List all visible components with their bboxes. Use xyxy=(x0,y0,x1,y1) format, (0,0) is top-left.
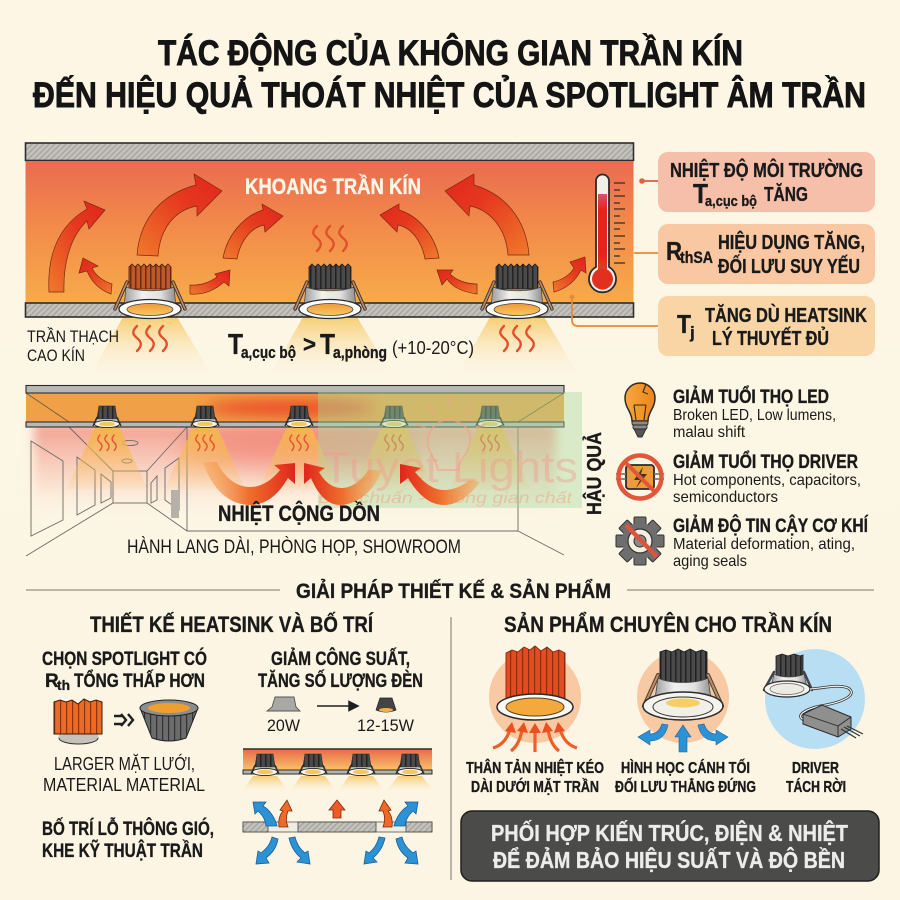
panel: consequence mechanical xyxy=(616,515,869,570)
panel: products for closed ceilings xyxy=(461,612,879,881)
product: extended heat sink xyxy=(466,646,604,796)
accumulated heat arrows xyxy=(203,462,480,505)
conclusion banner xyxy=(461,811,879,881)
panel: ambient temperature callout: a,cục bộ xyxy=(705,193,757,210)
spotlight 1 xyxy=(115,264,185,318)
heat waves xyxy=(133,226,534,351)
ventilation text: BỐ TRÍ LỖ THÔNG GIÓ, xyxy=(42,818,214,840)
lower slab xyxy=(26,303,634,317)
icon: 20W lamp xyxy=(267,697,300,735)
temperature formula: > xyxy=(303,331,316,357)
panel: Tj callout: TĂNG DÙ HEATSINK xyxy=(705,303,867,327)
panel: Tj callout xyxy=(570,294,875,356)
panel: RthSA callout xyxy=(634,224,875,284)
heat glow xyxy=(34,424,556,514)
cavity label: KHOANG TRẦN KÍN xyxy=(245,174,421,199)
panel: consequence driver: semiconductors xyxy=(673,489,778,506)
panel: consequence LED xyxy=(625,383,836,441)
light cones xyxy=(66,427,531,490)
gypsum ceiling label: CAO KÍN xyxy=(27,346,85,365)
panel: consequence LED: malau shift xyxy=(673,424,746,441)
title xyxy=(33,33,866,115)
icon: 12-15W lamp xyxy=(357,698,414,735)
arrow: to lower power xyxy=(317,702,358,710)
material text xyxy=(43,753,205,795)
icon: small heatsink xyxy=(54,699,102,744)
heat waves xyxy=(98,435,499,450)
material text: LARGER MẶT LƯỚI, xyxy=(54,753,195,774)
caption: THÂN TẢN NHIỆT KÉO xyxy=(466,758,604,777)
driver box xyxy=(803,705,851,737)
reduce power text xyxy=(258,648,423,692)
convection arrows xyxy=(49,174,586,294)
material text: MATERIAL MATERIAL xyxy=(43,775,205,795)
panel: ambient temperature callout xyxy=(639,152,875,212)
panel: closed ceiling cross-section xyxy=(26,143,634,372)
ventilation text xyxy=(42,818,214,862)
product: separate driver xyxy=(764,649,865,796)
watermark: Tuyet Lights xyxy=(322,443,578,492)
product: optimized fins xyxy=(615,649,756,796)
icon: broken bulb xyxy=(625,383,655,437)
spotlight 3 xyxy=(482,264,552,318)
icon: crossed driver xyxy=(616,456,664,498)
ventilation text: KHE KỸ THUẬT TRẦN xyxy=(42,840,203,862)
panel: RthSA callout: ĐỐI LƯU SUY YẾU xyxy=(718,254,860,278)
panel: consequence driver xyxy=(616,451,861,506)
temperature formula: T xyxy=(320,329,335,361)
reduce power text: TĂNG SỐ LƯỢNG ĐÈN xyxy=(258,670,423,692)
icon: 12-15W lamp: 12-15W xyxy=(357,716,414,735)
panel: Tj callout: j xyxy=(689,323,695,342)
gypsum ceiling label xyxy=(27,327,119,365)
room caption: HÀNH LANG DÀI, PHÒNG HỌP, SHOWROOM xyxy=(127,536,461,558)
watermark: Đèn chuẩn - Không gian chất xyxy=(318,489,573,507)
panel: heatsink design and layout xyxy=(42,611,434,864)
consequences heading: HẬU QUẢ xyxy=(582,432,606,515)
temperature formula: a,cục bộ xyxy=(241,343,296,362)
panel: consequence driver: GIẢM TUỔI THỌ DRIVER xyxy=(673,451,858,473)
upper slab xyxy=(26,143,634,160)
product: separate driver: TÁCH RỜI xyxy=(786,777,846,796)
title: TÁC ĐỘNG CỦA KHÔNG GIAN TRẦN KÍN xyxy=(158,33,743,73)
vented ceiling xyxy=(243,822,432,832)
temperature formula xyxy=(228,329,474,362)
choose spotlight text: th xyxy=(57,677,70,693)
section heading: solutions: GIẢI PHÁP THIẾT KẾ & SẢN PHẨM xyxy=(296,580,611,603)
temperature formula: T xyxy=(228,329,243,361)
spotlight 2 xyxy=(295,264,365,318)
ventilation arrows xyxy=(253,800,418,864)
product: optimized fins: ĐỐI LƯU THẲNG ĐỨNG xyxy=(615,776,756,796)
upward heat arrows xyxy=(493,729,577,752)
light cones xyxy=(92,317,577,372)
gypsum ceiling label: TRẦN THẠCH xyxy=(27,327,119,346)
icon: crossed gear xyxy=(616,517,664,565)
icon: double chevron xyxy=(114,714,133,726)
panel: consequence LED: Broken LED, Low lumens, xyxy=(673,407,836,424)
caption: HÌNH HỌC CÁNH TỐI xyxy=(621,757,750,777)
mini ceiling with spotlights xyxy=(241,749,434,792)
conclusion banner: ĐỂ ĐẢM BẢO HIỆU SUẤT VÀ ĐỘ BỀN xyxy=(493,845,845,873)
reduce power text: GIẢM CÔNG SUẤT, xyxy=(271,648,410,670)
icon: large heatsink xyxy=(140,700,198,741)
panel: consequence LED: GIẢM TUỔI THỌ LED xyxy=(673,386,829,408)
room heading: NHIỆT CỘNG DỒN xyxy=(218,501,380,526)
panel: room with accumulated heat xyxy=(26,386,582,558)
conclusion banner: PHỐI HỢP KIẾN TRÚC, ĐIỆN & NHIỆT xyxy=(491,819,848,846)
temperature formula: a,phòng xyxy=(333,343,387,362)
room lines xyxy=(26,393,564,556)
panel: ambient temperature callout: NHIỆT ĐỘ MÔI TRƯỜNG xyxy=(670,158,863,182)
panel: consequence mechanical: aging seals xyxy=(673,553,747,570)
panel: RthSA callout: HIỆU DỤNG TĂNG, xyxy=(718,230,865,254)
choose spotlight text xyxy=(42,648,207,693)
panel: RthSA callout: thSA xyxy=(680,248,713,267)
heading: SẢN PHẨM CHUYÊN CHO TRẦN KÍN xyxy=(504,612,832,637)
watermark xyxy=(318,392,582,508)
panel: RthSA callout: R xyxy=(666,236,682,266)
lower bar xyxy=(26,422,564,427)
choose spotlight text: TỔNG THẤP HƠN xyxy=(74,670,205,692)
thermometer xyxy=(589,175,625,292)
ceiling cavity xyxy=(26,393,564,422)
ceiling cavity xyxy=(26,161,634,303)
row of spotlights xyxy=(93,406,504,428)
cable xyxy=(801,686,851,720)
heading: THIẾT KẾ HEATSINK VÀ BỐ TRÍ xyxy=(90,611,374,637)
panel: ambient temperature callout: T xyxy=(693,178,708,209)
panel: consequence mechanical: Material deformation, ating, xyxy=(673,536,855,553)
product: extended heat sink: DÀI DƯỚI MẶT TRẦN xyxy=(471,777,599,796)
choose spotlight text: R xyxy=(45,671,59,692)
choose spotlight text: CHỌN SPOTLIGHT CÓ xyxy=(42,648,207,670)
top bar xyxy=(26,386,564,393)
panel: consequence driver: Hot components, capacitors, xyxy=(673,472,861,489)
caption: DRIVER xyxy=(792,760,839,777)
icon: 20W lamp: 20W xyxy=(267,716,300,735)
airflow arrows xyxy=(638,724,728,752)
temperature formula: (+10-20°C) xyxy=(392,338,474,358)
panel: ambient temperature callout: TĂNG xyxy=(764,183,808,206)
panel: Tj callout: T xyxy=(677,309,691,339)
panel: Tj callout: LÝ THUYẾT ĐỦ xyxy=(712,326,829,350)
